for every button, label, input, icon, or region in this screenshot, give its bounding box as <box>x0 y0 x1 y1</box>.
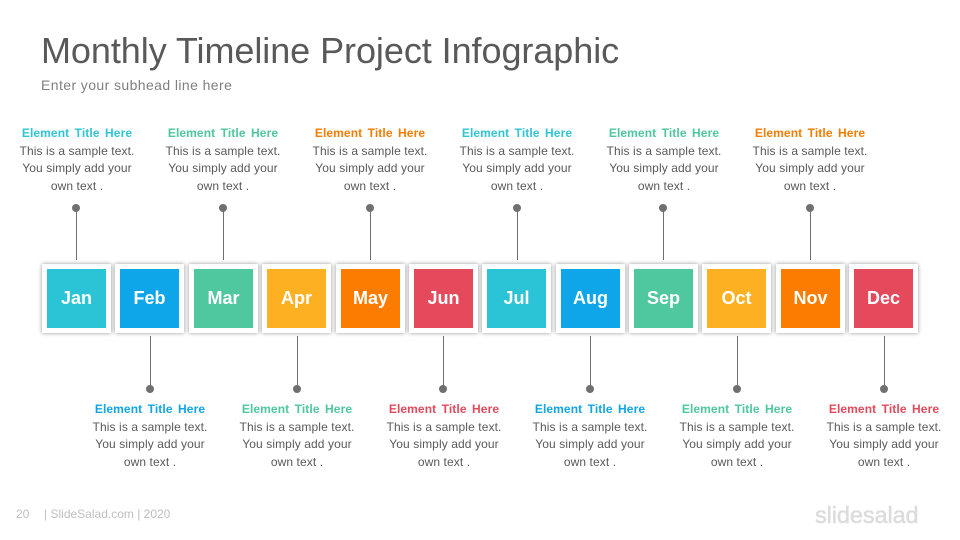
month card: Jun: Jun <box>427 288 460 308</box>
month card: Sep <box>629 264 698 332</box>
text block: Apr: Element Title Here <box>242 402 352 416</box>
month card: Dec: Dec <box>867 288 900 308</box>
text block: Mar: Element Title Here <box>168 126 278 140</box>
text block: Oct: You simply add your <box>682 437 792 451</box>
logo: slidesalad: slidesalad <box>815 502 919 528</box>
month card: Jun <box>409 264 478 332</box>
text block: Sep: This is a sample text. <box>607 144 721 158</box>
connector: Nov <box>806 204 814 260</box>
month card: Apr <box>262 264 331 332</box>
text block: Jan: own text . <box>51 178 103 192</box>
text block: Sep <box>606 126 721 192</box>
title: Monthly Timeline Project Infographic <box>41 30 619 71</box>
text block: Aug <box>532 402 647 468</box>
month card: Feb: Feb <box>133 288 166 308</box>
text block: Feb: This is a sample text. <box>93 420 207 434</box>
text block: May: This is a sample text. <box>313 144 427 158</box>
text block: Mar <box>166 126 280 192</box>
text block: Dec <box>826 402 941 468</box>
text block: Dec: You simply add your <box>829 437 939 451</box>
month card: Aug <box>556 264 625 332</box>
month card: Mar: Mar <box>207 288 240 308</box>
month card: Mar <box>189 264 258 332</box>
text block: Apr: You simply add your <box>242 437 352 451</box>
text block: Feb <box>92 402 207 468</box>
text block: Oct: own text . <box>711 454 763 468</box>
text block: Jan <box>20 126 134 192</box>
connector: May <box>366 204 374 260</box>
text block: Aug: own text . <box>564 454 616 468</box>
text block: Feb: You simply add your <box>95 437 205 451</box>
text block: Mar: own text . <box>197 178 249 192</box>
text block: Nov: own text . <box>784 178 836 192</box>
text block: Jan: Element Title Here <box>22 126 132 140</box>
text block: May: own text . <box>344 178 396 192</box>
text block: Feb: Element Title Here <box>95 402 205 416</box>
text block: Jun: You simply add your <box>389 437 499 451</box>
month card: Feb <box>115 264 184 332</box>
text block: Oct: Element Title Here <box>682 402 792 416</box>
connector: Apr <box>293 336 301 393</box>
text block: Jul <box>460 126 574 192</box>
month card: May <box>336 264 405 332</box>
connector: Feb <box>146 336 154 393</box>
text block: Sep: own text . <box>638 178 690 192</box>
text block: Dec: own text . <box>858 454 910 468</box>
text block: Feb: own text . <box>124 454 176 468</box>
connector: Oct <box>733 336 741 393</box>
connector: Mar <box>219 204 227 260</box>
text block: Oct: This is a sample text. <box>680 420 794 434</box>
month card: Oct <box>702 264 771 332</box>
connector: Dec <box>880 336 888 393</box>
text block: Aug: This is a sample text. <box>533 420 647 434</box>
text block: Jan: This is a sample text. <box>20 144 134 158</box>
month card: Jan <box>42 264 111 332</box>
text block: Sep: You simply add your <box>609 161 719 175</box>
text block: Nov <box>752 126 867 192</box>
month card: Nov: Nov <box>793 288 828 308</box>
month card: Dec <box>849 264 918 332</box>
text block: Sep: Element Title Here <box>609 126 719 140</box>
text block: Jul: Element Title Here <box>462 126 572 140</box>
month card: Apr: Apr <box>281 288 312 308</box>
text block: Jun <box>386 402 501 468</box>
text block: Jul: You simply add your <box>462 161 572 175</box>
connector: Jun <box>439 336 447 393</box>
text block: Jun: own text . <box>418 454 470 468</box>
month card: Sep: Sep <box>647 288 680 308</box>
month card: Jul: Jul <box>503 288 530 308</box>
text block: Jan: You simply add your <box>22 161 132 175</box>
month card: Oct: Oct <box>721 288 752 308</box>
text block: Apr: This is a sample text. <box>240 420 354 434</box>
connector: Sep <box>659 204 667 260</box>
text block: Nov: You simply add your <box>755 161 865 175</box>
subhead: Enter your subhead line here <box>41 77 232 93</box>
connector: Jan <box>72 204 80 260</box>
text block: Jul: own text . <box>491 178 543 192</box>
text block: Jun: This is a sample text. <box>387 420 501 434</box>
text block: Jun: Element Title Here <box>389 402 499 416</box>
text block: Apr: own text . <box>271 454 323 468</box>
text block: Dec: Element Title Here <box>829 402 939 416</box>
month card: May: May <box>353 288 388 308</box>
text block: Jul: This is a sample text. <box>460 144 574 158</box>
text block: Nov: Element Title Here <box>755 126 865 140</box>
month card: Jan: Jan <box>61 288 92 308</box>
month card: Nov <box>776 264 845 332</box>
month card: Jul <box>482 264 551 332</box>
text block: Mar: This is a sample text. <box>166 144 280 158</box>
connector: Jul <box>513 204 521 260</box>
month card: Aug: Aug <box>573 288 608 308</box>
text block: Apr <box>240 402 354 468</box>
connector: Aug <box>586 336 594 393</box>
text block: Oct <box>680 402 794 468</box>
text block: Mar: You simply add your <box>168 161 278 175</box>
text block: Aug: You simply add your <box>535 437 645 451</box>
text block: May: You simply add your <box>315 161 425 175</box>
text block: Aug: Element Title Here <box>535 402 645 416</box>
text block: Nov: This is a sample text. <box>753 144 867 158</box>
text block: May: Element Title Here <box>315 126 425 140</box>
footer: page number and credit: 20 | SlideSalad.com | 2020 <box>16 507 170 521</box>
text block: Dec: This is a sample text. <box>827 420 941 434</box>
text block: May <box>312 126 427 192</box>
